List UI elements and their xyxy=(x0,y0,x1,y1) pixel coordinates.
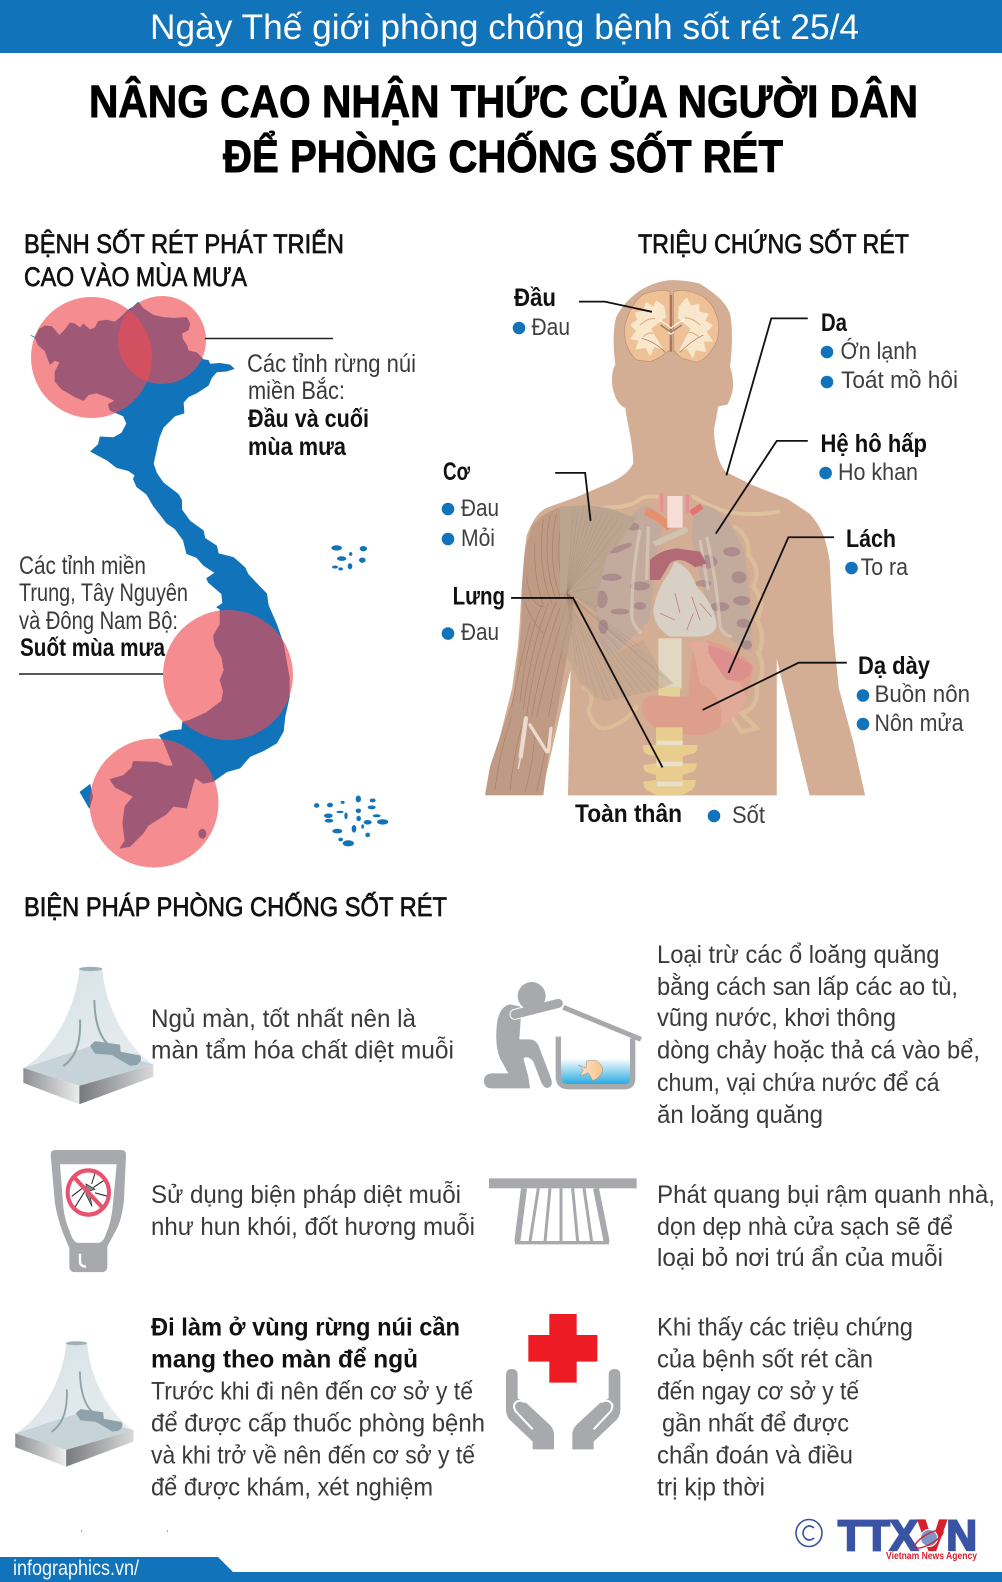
text: smoke and incense: Sử dụng biện pháp diệt muỗi xyxy=(151,1180,461,1209)
text: seek care: đến ngay cơ sở y tế xyxy=(657,1378,859,1406)
symptom label: muscle: Cơ xyxy=(443,458,470,486)
stomach shading xyxy=(687,640,747,727)
brain xyxy=(625,290,719,362)
torso organs xyxy=(560,493,778,796)
title xyxy=(89,76,918,182)
upper spine xyxy=(658,638,682,698)
text: smoke and incense: như hun khói, đốt hương muỗi xyxy=(151,1212,475,1241)
map: country outline xyxy=(31,302,388,848)
great vessels over heart xyxy=(650,548,707,580)
map text: northern provinces: miền Bắc: xyxy=(248,376,345,405)
copyright mark xyxy=(796,1520,822,1546)
lung highlight bands xyxy=(632,527,732,637)
heading: prevention: BIỆN PHÁP PHÒNG CHỐNG SỐT RÉT xyxy=(24,890,447,922)
symptom label: head: Đau xyxy=(532,314,570,341)
arm muscle xyxy=(485,506,600,795)
text: seek care: trị kịp thời xyxy=(657,1474,765,1502)
icon: man with fish tank xyxy=(484,982,641,1088)
symptom label: respiratory xyxy=(819,430,927,486)
icon: rake xyxy=(489,1178,637,1243)
text: eliminate larvae: dòng chảy hoặc thả cá vào bể, xyxy=(657,1036,980,1064)
leader line: north xyxy=(205,338,333,340)
map text: central provinces xyxy=(19,552,188,662)
symptom label: skin xyxy=(821,309,958,394)
symptom label: stomach: Dạ dày xyxy=(858,652,930,680)
header banner xyxy=(0,0,1002,53)
map text: northern provinces: Đầu và cuối xyxy=(248,405,369,433)
map text: northern provinces: Các tỉnh rừng núi xyxy=(247,350,416,378)
text: forest work advice: Đi làm ở vùng rừng núi cần xyxy=(151,1314,460,1342)
TTXVN logo: Vietnam News Agency xyxy=(886,1551,977,1562)
symptom label: back: Đau xyxy=(461,619,499,646)
stomach xyxy=(642,640,753,735)
symptom label: back: Lưng xyxy=(453,582,505,610)
text: bed net: màn tẩm hóa chất diệt muỗi xyxy=(151,1036,454,1064)
specks xyxy=(81,1530,168,1532)
text: clear bushes: dọn dẹp nhà cửa sạch sẽ để xyxy=(657,1213,953,1241)
symptom label: back xyxy=(442,582,505,646)
heading: rainy season: CAO VÀO MÙA MƯA xyxy=(24,261,247,292)
text: eliminate larvae: Loại trừ các ổ loăng quăng xyxy=(657,941,940,969)
title: NÂNG CAO NHẬN THỨC CỦA NGƯỜI DÂN xyxy=(89,76,918,127)
logo globe xyxy=(913,1527,945,1551)
forearm tendons xyxy=(518,718,551,768)
heading: rainy season xyxy=(24,227,344,292)
lungs xyxy=(596,505,752,655)
symptom label: skin: Ớn lạnh xyxy=(840,338,917,365)
trachea and aorta xyxy=(645,493,702,544)
map text: northern provinces: mùa mưa xyxy=(248,433,347,461)
clavicles and ribs xyxy=(583,496,778,732)
text: clear bushes: Phát quang bụi rậm quanh nhà, xyxy=(657,1181,995,1209)
symptom label: muscle: Mỏi xyxy=(461,525,495,552)
heading: symptoms: TRIỆU CHỨNG SỐT RÉT xyxy=(638,227,909,259)
map of Vietnam with highlighted regions xyxy=(31,296,388,868)
text: eliminate larvae: bằng cách san lấp các ao tù, xyxy=(657,972,958,1001)
leader lines xyxy=(511,302,847,767)
map text: central provinces: Trung, Tây Nguyên xyxy=(19,579,188,607)
text: clear bushes: loại bỏ nơi trú ẩn của muỗi xyxy=(657,1243,943,1272)
text: seek care: chẩn đoán và điều xyxy=(657,1442,853,1470)
symptom label: whole body: Sốt xyxy=(732,802,765,829)
heart xyxy=(653,562,717,637)
symptom label: respiratory: Ho khan xyxy=(838,459,918,486)
text: bed net: Ngủ màn, tốt nhất nên là xyxy=(151,1005,416,1033)
body illustration xyxy=(485,280,865,796)
symptom label: skin: Da xyxy=(821,309,848,337)
icon: mosquito net 1 xyxy=(23,967,153,1104)
text: seek care: của bệnh sốt rét cần xyxy=(657,1346,873,1374)
text: eliminate larvae xyxy=(657,941,980,1129)
symptom label: head: Đầu xyxy=(514,284,556,312)
fish xyxy=(578,1061,603,1081)
symptom label: stomach: Nôn mửa xyxy=(874,710,964,737)
text: seek care: gần nhất để được xyxy=(662,1410,849,1438)
silhouette xyxy=(485,280,865,795)
symptom label: skin: Toát mồ hôi xyxy=(841,367,958,394)
map text: central provinces: Các tỉnh miền xyxy=(19,552,146,580)
map text: central provinces: và Đông Nam Bộ: xyxy=(19,607,178,635)
icon: mosquito net 2 xyxy=(15,1341,134,1467)
symptom label: stomach: Buồn nôn xyxy=(874,681,970,708)
icon: red cross and hands xyxy=(506,1314,620,1449)
heart vessels xyxy=(660,593,712,630)
text: forest work advice: mang theo màn để ngủ xyxy=(151,1346,418,1374)
no-mosquito sign xyxy=(68,1170,109,1215)
text: eliminate larvae: ăn loăng quăng xyxy=(657,1101,823,1129)
map text: central provinces: Suốt mùa mưa xyxy=(20,634,166,662)
text: bed net xyxy=(151,1005,454,1064)
header banner: Ngày Thế giới phòng chống bệnh sốt rét 25/4 xyxy=(150,8,859,47)
symptom label: muscle: Đau xyxy=(461,495,499,522)
leader line: central xyxy=(19,673,163,675)
map text: northern provinces xyxy=(247,350,416,461)
text: seek care xyxy=(657,1314,913,1502)
text: eliminate larvae: vũng nước, khơi thông xyxy=(657,1004,896,1032)
icon: repellent bottle xyxy=(51,1150,126,1272)
lung shading xyxy=(596,523,752,650)
text: smoke and incense xyxy=(151,1180,475,1241)
text: forest work advice: để được cấp thuốc phòng bệnh xyxy=(151,1410,485,1438)
symptom label: muscle xyxy=(442,458,499,552)
map: red highlight circles xyxy=(31,296,293,868)
symptom label: whole body xyxy=(575,800,765,829)
symptom label: whole body: Toàn thân xyxy=(575,800,682,828)
symptom label: spleen: To ra xyxy=(861,554,909,581)
lower spine xyxy=(643,727,697,796)
symptom label: stomach xyxy=(857,652,970,737)
title: ĐỂ PHÒNG CHỐNG SỐT RÉT xyxy=(223,131,783,182)
TTXVN logo: TTXVN xyxy=(838,1512,977,1560)
symptom label: spleen xyxy=(845,525,909,581)
symptom label: head xyxy=(513,284,570,341)
symptom label: respiratory: Hệ hô hấp xyxy=(820,430,927,458)
heading: rainy season: BỆNH SỐT RÉT PHÁT TRIỂN xyxy=(24,227,344,259)
text: forest work advice: để được khám, xét nghiệm xyxy=(151,1474,433,1502)
text: eliminate larvae: chum, vại chứa nước để cá xyxy=(657,1069,940,1097)
spleen xyxy=(708,645,752,681)
text: forest work advice: Trước khi đi nên đến cơ sở y tế xyxy=(151,1378,473,1406)
symptom label: spleen: Lách xyxy=(846,525,896,553)
text: seek care: Khi thấy các triệu chứng xyxy=(657,1314,913,1342)
text: forest work advice xyxy=(151,1314,485,1502)
arm fibres xyxy=(495,510,583,792)
map: Truong Sa islands xyxy=(314,795,388,846)
footer bar xyxy=(0,1557,1002,1582)
map: Hoang Sa islands xyxy=(331,545,367,570)
footer bar: infographics.vn/ xyxy=(13,1557,139,1580)
text: forest work advice: và khi trở về nên đến cơ sở y tế xyxy=(151,1442,475,1470)
text: clear bushes xyxy=(657,1181,995,1272)
chest muscle fan xyxy=(560,505,673,702)
